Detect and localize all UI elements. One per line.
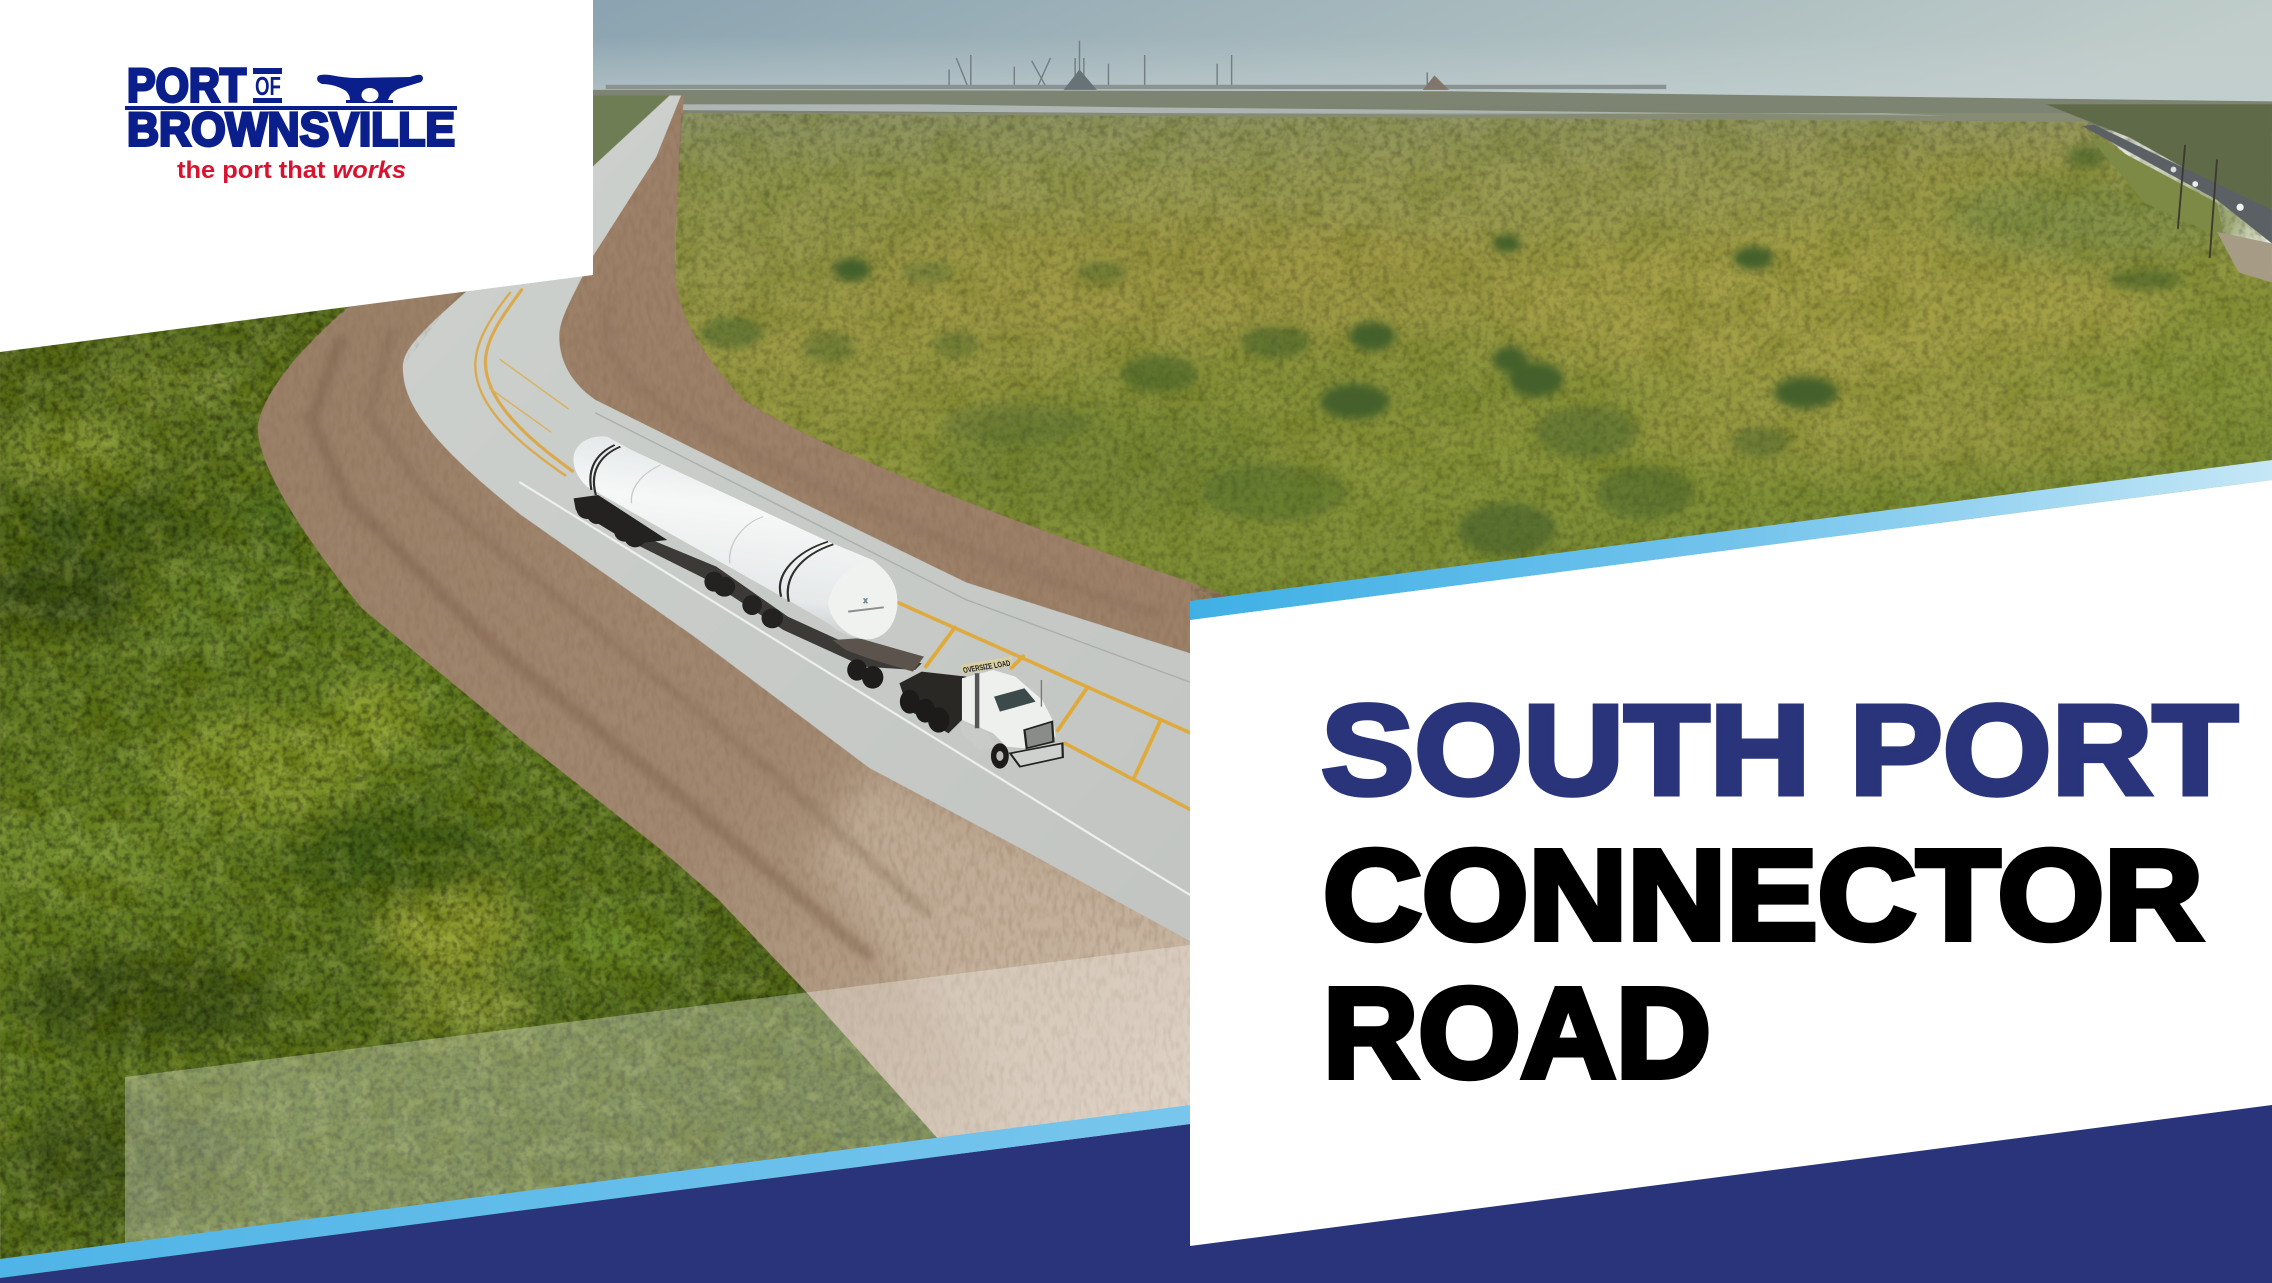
logo: OF mark (253, 68, 282, 103)
light blue accent stripe, bottom (0, 1105, 1190, 1278)
truck: oversize load banner: OVERSIZE LOAD (962, 659, 1012, 675)
truck: white cylindrical tank (573, 436, 897, 639)
photo: highway at upper right (2046, 104, 2272, 283)
photo: scattered shrubs in the field (700, 145, 2182, 555)
photo: grass field (675, 113, 2272, 609)
photo: oversize truck carrying a white tank (573, 436, 1063, 769)
title line: ROAD: ROAD (1323, 962, 1711, 1105)
photo: dirt wheel tracks (312, 304, 1159, 956)
photo: ground base layer (0, 261, 1203, 1188)
light blue accent stripe, title panel (1190, 460, 2272, 620)
photo: grain on the bushland (0, 306, 936, 1272)
truck: white cab (960, 670, 1063, 769)
photo: far marsh and water (593, 90, 2272, 130)
logo panel (0, 0, 593, 352)
photo: horizon haze (580, 36, 2272, 101)
truck: middle dolly (704, 572, 783, 628)
photo: field tonal patches (840, 145, 2260, 522)
title line: CONNECTOR: CONNECTOR (1323, 824, 2203, 967)
photo: far left strip (593, 96, 675, 171)
logo: divider rule (125, 106, 457, 110)
photo: grain on the field (667, 113, 2272, 613)
title panel (1190, 480, 2272, 1246)
translucent white panel over lower photo (125, 945, 1190, 1245)
photo: concrete connector road (403, 96, 1191, 942)
logo: mooring cleat icon (317, 75, 423, 103)
logo: PORT wordmark: PORT (127, 58, 246, 112)
logo: tagline: the port that works (177, 157, 406, 184)
photo: pale gravel along the road edge (811, 768, 1191, 1145)
navy base band (0, 1000, 2272, 1283)
logo: OF mark: OF (255, 71, 281, 101)
title line: SOUTH PORT: SOUTH PORT (1321, 679, 2238, 822)
truck: rear dolly (574, 495, 667, 547)
photo: dirt shoulder, left of the road (258, 283, 1191, 1159)
truck: tractor rear wheels and frame (899, 672, 966, 733)
logo: BROWNSVILLE wordmark: BROWNSVILLE (127, 102, 455, 156)
truck: trailer frame (587, 510, 922, 670)
logo: Port of Brownsville (125, 58, 457, 184)
photo: dense green bushland on the left (0, 297, 956, 1282)
photo: overcast sky (580, 0, 2272, 104)
truck: oversize load banner (961, 656, 1012, 675)
photo: haze over far field (675, 113, 2272, 178)
photo: grain on the dirt (263, 195, 1190, 1137)
photo: distant port skyline and cranes (606, 41, 1666, 90)
truck: flatbed deck (832, 638, 924, 689)
photo: dirt shoulder, right of the road (551, 96, 1232, 681)
photo: road markings (475, 290, 1191, 895)
